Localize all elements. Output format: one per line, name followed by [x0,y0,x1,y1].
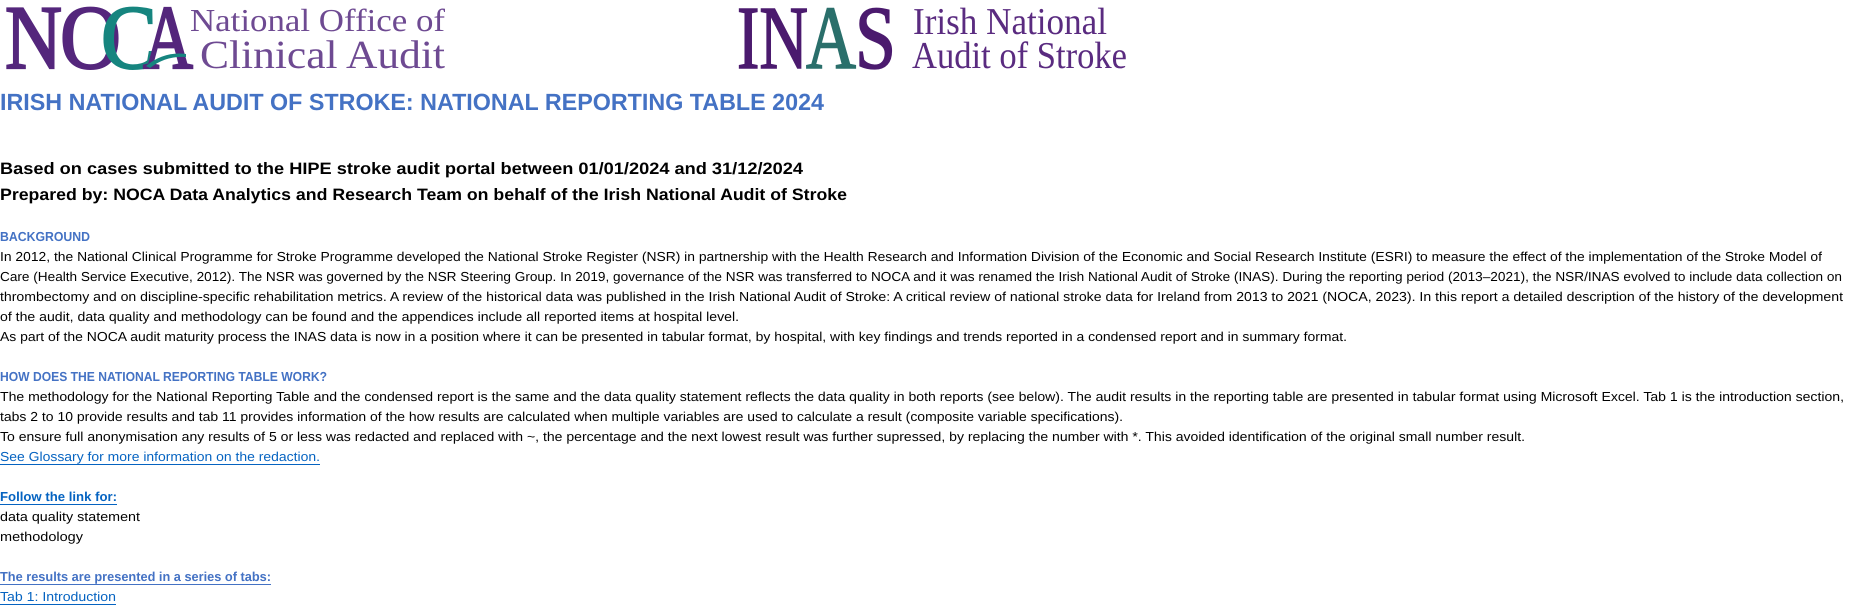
link heading: follow the link: Follow the link for: [0,489,117,504]
list: linked documents: methodology [0,529,84,544]
list: linked documents: data quality statement [0,509,140,524]
text block: methodology [0,389,1844,444]
logo: NOCA National Office of Clinical Audit: National Office of [190,2,445,38]
heading: background: BACKGROUND [0,229,90,244]
logo: INAS Irish National Audit of Stroke: Irish National [913,1,1107,43]
heading: results tabs: The results are presented in a series of tabs: [0,569,271,584]
title: IRISH NATIONAL AUDIT OF STROKE: NATIONAL REPORTING TABLE 2024 [0,89,824,115]
text block: background: As part of the NOCA audit maturity process the INAS data is now in a position where it can be presented in tabular format, by hospital, with key findings and trends reported in a condensed report and in summary format. [0,329,1347,344]
text block: methodology: The methodology for the National Reporting Table and the condensed report is the same and the data quality statement reflects the data quality in both reports (see below). The audit results in the reporting table are presented in tabular format using Microsoft Excel. Tab 1 is the introduction section, [0,389,1844,404]
logo: NOCA National Office of Clinical Audit: Clinical Audit [200,32,445,77]
text block: methodology: To ensure full anonymisation any results of 5 or less was redacted and replaced with ~, the percentage and the next lowest result was further supressed, by replacing the number with *. This avoided identification of the original small number result. [0,429,1525,444]
link: glossary: See Glossary for more information on the redaction. [0,449,320,464]
link: tab 1: Tab 1: Introduction [0,589,116,604]
subtitle: source and authors: Prepared by: NOCA Data Analytics and Research Team on behalf of the Irish National Audit of Stroke [0,186,847,204]
logo: NOCA National Office of Clinical Audit [5,0,445,88]
logo: INAS Irish National Audit of Stroke: Audit of Stroke [912,35,1127,77]
logo: INAS Irish National Audit of Stroke [737,0,1127,88]
text block: background: thrombectomy and on discipline-specific rehabilitation metrics. A review of the historical data was published in the Irish National Audit of Stroke: A critical review of national stroke data for Ireland from 2013 to 2021 (NOCA, 2023). In this report a detailed description of the history of the development [0,289,1843,304]
subtitle: source and authors: Based on cases submitted to the HIPE stroke audit portal between 01/01/2024 and 31/12/2024 [0,160,804,178]
list: linked documents [0,509,140,544]
swoosh [146,54,186,68]
text block: background: Care (Health Service Executive, 2012). The NSR was governed by the NSR Steering Group. In 2019, governance of the NSR was transferred to NOCA and it was renamed the Irish National Audit of Stroke (INAS). During the reporting period (2013–2021), the NSR/INAS evolved to include data collection on [0,269,1842,284]
text block: background: In 2012, the National Clinical Programme for Stroke Programme developed the National Stroke Register (NSR) in partnership with the Health Research and Information Division of the Economic and Social Research Institute (ESRI) to measure the effect of the implementation of the Stroke Model of [0,249,1822,264]
subtitle: source and authors [0,160,847,204]
text block: background: of the audit, data quality and methodology can be found and the appendices include all reported items at hospital level. [0,309,739,324]
text block: methodology: tabs 2 to 10 provide results and tab 11 provides information of the how results are calculated when multiple variables are used to calculate a result (composite variable specifications). [0,409,1123,424]
heading: how does the table work: HOW DOES THE NATIONAL REPORTING TABLE WORK? [0,369,327,384]
text block: background [0,249,1843,344]
